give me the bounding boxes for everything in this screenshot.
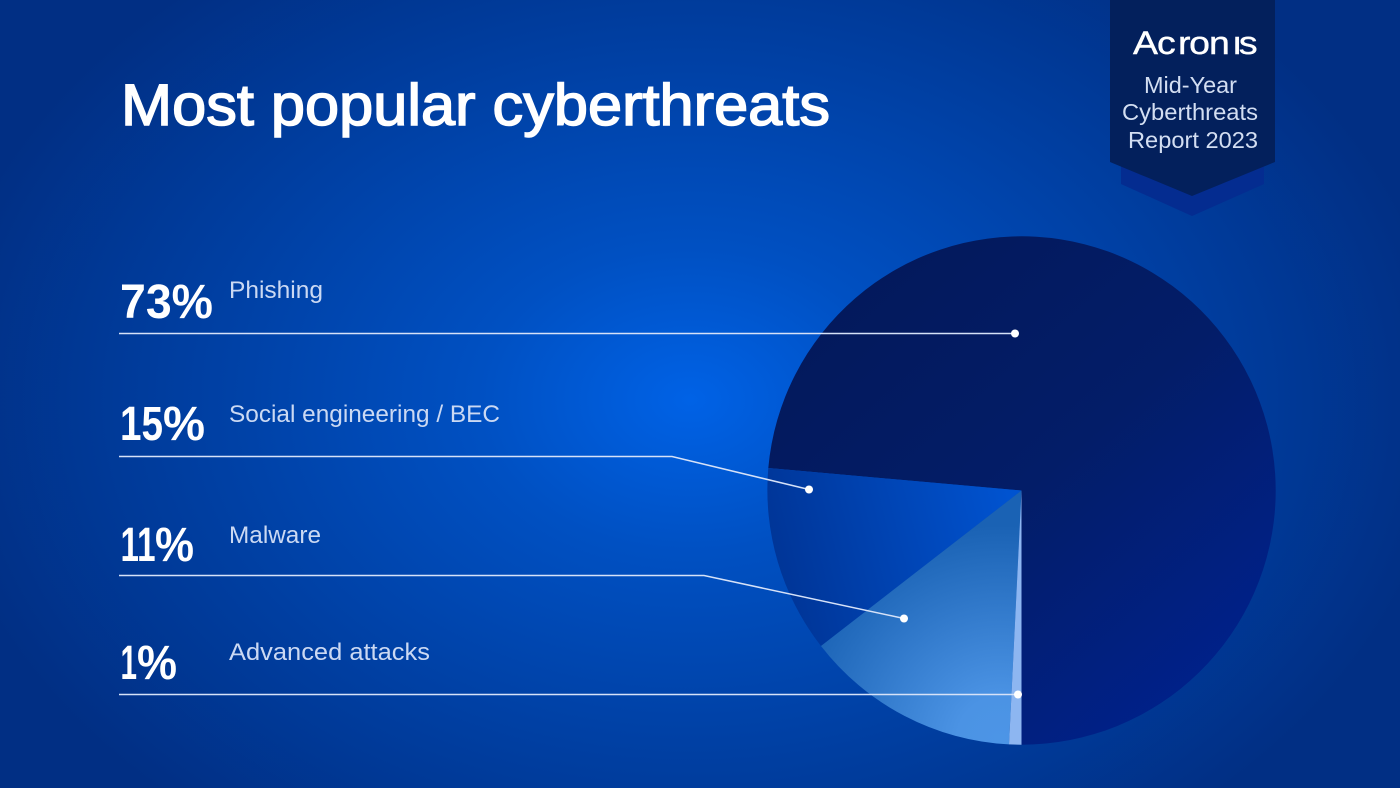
report name: Cyberthreats [1122, 99, 1258, 125]
value: 15 [120, 398, 163, 451]
value: 1 [120, 637, 137, 690]
slice: advanced attacks 1% [1009, 490, 1022, 745]
label: Social engineering / BEC [229, 401, 500, 428]
value [120, 519, 194, 572]
logo wordmark: Acronis [1133, 26, 1258, 61]
leader line [119, 456, 813, 494]
value: 11 [120, 519, 156, 572]
leader line [119, 576, 908, 622]
ribbon [1110, 0, 1275, 196]
leader line [119, 330, 1019, 338]
value: 73% [120, 276, 213, 329]
value: % [163, 398, 205, 451]
label: Phishing [229, 277, 323, 304]
badge: report ribbon [1110, 0, 1275, 216]
row: advanced attacks [119, 637, 1022, 698]
value [120, 398, 205, 451]
leader line [119, 690, 1022, 698]
value [120, 637, 177, 690]
value: % [155, 519, 194, 572]
report name: Report 2023 [1128, 127, 1258, 153]
row: phishing [119, 276, 1019, 338]
slice: malware 11% [821, 490, 1022, 744]
pie chart [767, 236, 1276, 745]
label: Advanced attacks [229, 639, 430, 666]
row: malware [119, 519, 908, 622]
row: social engineering [119, 398, 813, 494]
slice: phishing 73% [768, 236, 1276, 745]
logo letter detail [1232, 28, 1243, 36]
report name: Mid-Year [1144, 72, 1237, 98]
slice: social engineering 15% [767, 468, 1022, 646]
title: Most popular cyberthreats [121, 73, 830, 138]
value: % [137, 637, 177, 690]
ribbon shadow [1121, 150, 1264, 216]
label: Malware [229, 522, 321, 549]
report name [1122, 72, 1258, 153]
